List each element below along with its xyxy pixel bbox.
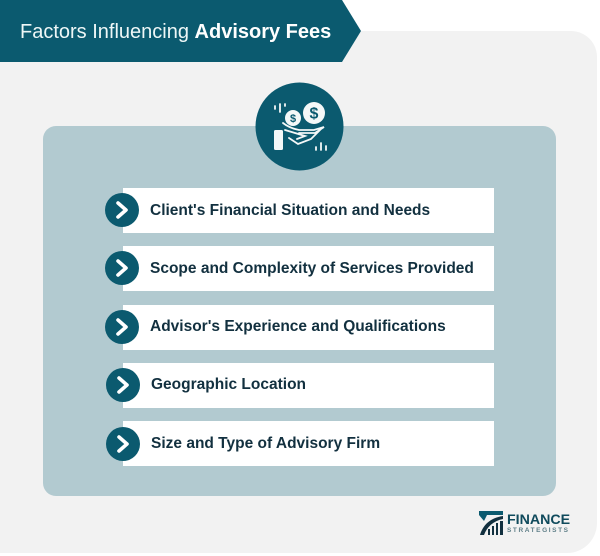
text: row 1: Client's Financial Situation and Needs	[150, 202, 430, 219]
row 3	[105, 305, 494, 350]
icon: coin symbols: $	[310, 106, 319, 122]
icon: chevron 2	[105, 251, 139, 285]
text: row 5: Size and Type of Advisory Firm	[151, 435, 380, 452]
text: row 2: Scope and Complexity of Services Provided	[150, 260, 474, 277]
icon: coin symbols: $	[290, 113, 296, 125]
row 1	[105, 188, 494, 233]
logo subtext: STRATEGISTS	[507, 527, 570, 534]
row 4	[106, 363, 494, 408]
logo text: FINANCE	[507, 512, 570, 528]
row 2	[105, 246, 494, 291]
logo mark	[479, 511, 503, 535]
text: row 4: Geographic Location	[151, 376, 306, 393]
icon: chevron 3	[105, 310, 139, 344]
icon: hand with coins	[256, 82, 344, 170]
icon: chevron 5	[106, 427, 140, 461]
icon: coin symbols	[290, 106, 319, 125]
text: row 3: Advisor's Experience and Qualifications	[150, 318, 446, 335]
row 5	[106, 421, 494, 466]
icon: chevron 1	[105, 193, 139, 227]
panel: factors container	[43, 126, 556, 496]
title: Factors Influencing Advisory Fees	[20, 21, 331, 43]
logo: Finance Strategists	[479, 511, 570, 535]
title banner	[0, 0, 361, 62]
icon: chevron 4	[106, 368, 140, 402]
